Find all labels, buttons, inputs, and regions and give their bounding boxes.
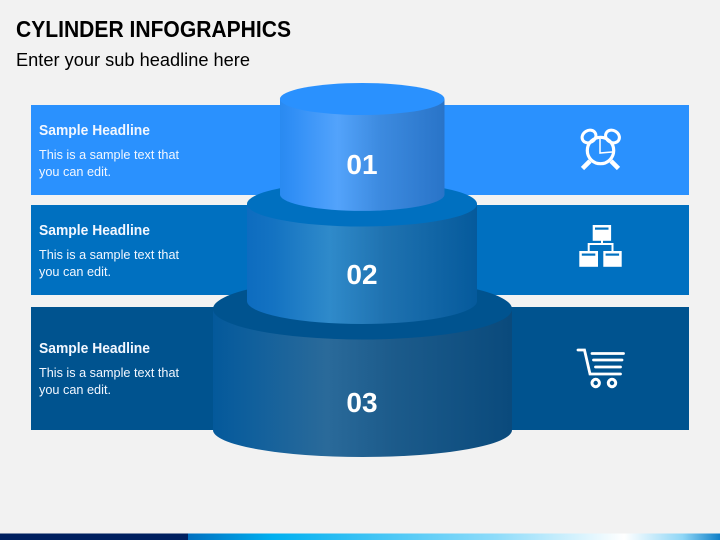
cylinder 01 bbox=[280, 83, 445, 211]
cylinder 03 bbox=[213, 278, 512, 457]
row 3 body text bbox=[39, 365, 179, 397]
row 3 headline: Sample Headline bbox=[39, 341, 150, 357]
row 2 body text bbox=[39, 247, 179, 279]
panel: row 2 bbox=[31, 205, 689, 295]
panel: row 1 bbox=[31, 105, 689, 195]
row 1 body text: you can edit. bbox=[39, 164, 111, 179]
row 3 body text: This is a sample text that bbox=[39, 365, 179, 380]
icon: shopping cart bbox=[578, 350, 624, 387]
row 2 body text: you can edit. bbox=[39, 264, 111, 279]
icon: alarm clock bbox=[580, 128, 622, 168]
number 03: 03 bbox=[346, 387, 378, 418]
row 2 body text: This is a sample text that bbox=[39, 247, 179, 262]
title: CYLINDER INFOGRAPHICS bbox=[16, 16, 291, 42]
subtitle: Enter your sub headline here bbox=[16, 49, 250, 70]
footer bar bbox=[0, 534, 720, 540]
cylinder 02 bbox=[247, 182, 477, 324]
row 2 headline: Sample Headline bbox=[39, 223, 150, 239]
icon: hierarchy bbox=[579, 225, 622, 267]
row 1 body text: This is a sample text that bbox=[39, 147, 179, 162]
row 1 body text bbox=[39, 147, 179, 179]
row 1 headline: Sample Headline bbox=[39, 123, 150, 139]
number 01: 01 bbox=[346, 149, 378, 180]
number 02: 02 bbox=[346, 259, 378, 290]
panel: row 3 bbox=[31, 307, 689, 430]
row 3 body text: you can edit. bbox=[39, 382, 111, 397]
